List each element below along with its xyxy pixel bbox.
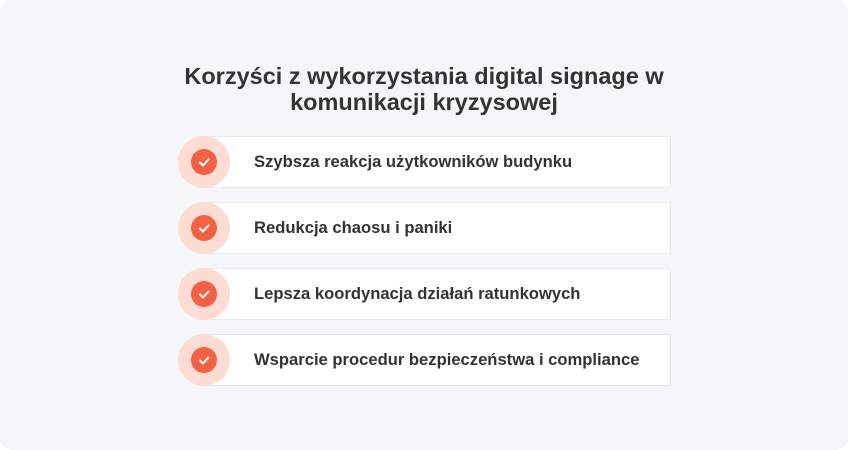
item 1: Szybsza reakcja użytkowników budynku: [254, 152, 572, 171]
icon: check: [178, 202, 230, 254]
item 3: [178, 268, 671, 320]
item 2: Redukcja chaosu i paniki: [254, 218, 452, 237]
title: komunikacji kryzysowej: [290, 89, 558, 115]
title: Korzyści z wykorzystania digital signage w: [184, 63, 664, 89]
item 3: Lepsza koordynacja działań ratunkowych: [254, 284, 580, 303]
title: [184, 63, 664, 115]
item 4: [178, 334, 671, 386]
item 1: [178, 136, 671, 188]
item 2: [178, 202, 671, 254]
icon: check: [178, 268, 230, 320]
icon: check: [178, 334, 230, 386]
item 4: Wsparcie procedur bezpieczeństwa i compliance: [254, 350, 639, 369]
icon: check: [178, 136, 230, 188]
